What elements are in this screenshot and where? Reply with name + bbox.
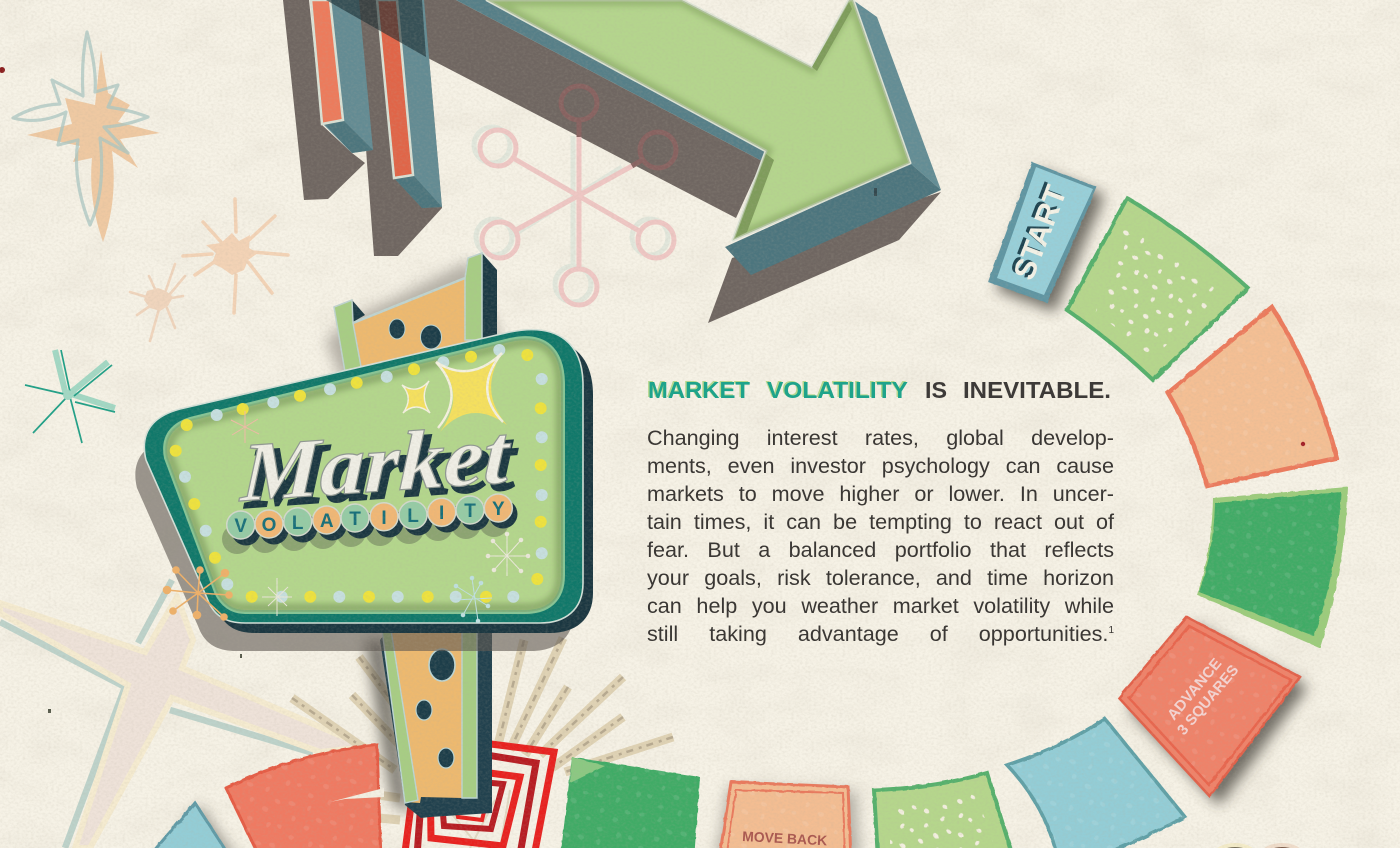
arrow right shaft: [394, 0, 442, 208]
arrow cast shadow: [283, 0, 365, 200]
paragraph text: can help you weather market volatility while: [647, 593, 1114, 618]
Volatility lettered balls: V: [234, 516, 247, 537]
paragraph text: ments, even investor psychology can cause: [647, 453, 1114, 478]
paragraph text: [647, 425, 1114, 646]
board tile: green, centre: [560, 757, 700, 848]
board tile: advance 3 squares: 3 SQUARES: [1174, 662, 1242, 739]
heading: Market Volatility is inevitable: [646, 376, 1111, 403]
Volatility lettered balls: I: [439, 503, 444, 524]
partial circles at bottom edge: [1214, 843, 1303, 848]
sign green face: [165, 338, 563, 612]
paragraph text: markets to move higher or lower. In uncer-: [647, 481, 1114, 506]
start tile: START: [1008, 181, 1074, 285]
decorative star: big faded star, bottom left: [0, 580, 367, 848]
Volatility lettered balls: I: [381, 508, 387, 529]
heading: Market Volatility is inevitable: IS: [925, 377, 947, 403]
start tile: START: [1005, 179, 1071, 283]
board tile: move back: [716, 782, 860, 848]
arrow inner shading: [735, 2, 852, 238]
arrow walls: [456, 0, 766, 161]
Volatility lettered balls: Y: [492, 499, 505, 520]
big arrow sign, top centre: [283, 0, 941, 323]
blue atom on sign: [454, 576, 492, 623]
board tile: move back: MOVE BACK: [742, 828, 828, 848]
coral tile torn edge: [330, 788, 384, 802]
board tile: advance 3 squares: [1119, 617, 1308, 806]
board tile: peach: [1168, 307, 1337, 486]
lower post holes: [429, 649, 455, 681]
arrow green top face: [487, 0, 910, 240]
board tile: advance 3 squares: ADVANCE: [1164, 655, 1225, 724]
sign post: lower part: [365, 630, 492, 818]
paragraph text: still taking advantage of opportunities.1: [647, 621, 1114, 646]
paragraph text: your goals, risk tolerance, and time horizon: [647, 565, 1114, 590]
heading: Market Volatility is inevitable: VOLATILITY: [767, 377, 908, 403]
concentric red squares: [404, 735, 554, 848]
paragraph text: tain times, it can be tempting to react out of: [647, 509, 1114, 534]
paper specks: [0, 67, 1305, 713]
start tile: [988, 162, 1105, 312]
sign marquee lights: [170, 344, 548, 603]
paragraph text: fear. But a balanced portfolio that reflects: [647, 537, 1114, 562]
Volatility lettered balls: A: [320, 511, 334, 532]
white atom on sign: [486, 532, 530, 576]
heading: Market Volatility is inevitable: VOLATILITY: [766, 376, 906, 402]
sign yellow star large: [436, 353, 507, 432]
white sparkle on sign: [262, 578, 292, 616]
sign dark extrusion: [154, 340, 593, 633]
paragraph text: Changing interest rates, global develop-: [647, 425, 1114, 450]
orange atom at sign corner: [164, 567, 232, 620]
board tile: blue, lower right: [1007, 719, 1185, 848]
sign yellow star small: [402, 381, 430, 413]
decorative star: teal asterisk: [25, 350, 115, 443]
heading: Market Volatility is inevitable: MARKET: [646, 376, 748, 402]
Market script lettering: Market: [243, 414, 519, 526]
Volatility lettered balls: [222, 494, 518, 554]
board tile: coral, left: [226, 745, 384, 848]
pink sparkle on sign: [231, 411, 259, 443]
upper post holes: [389, 319, 405, 339]
heading: Market Volatility is inevitable: MARKET: [648, 377, 750, 403]
decorative star: orange and teal sparkle, top left: [13, 32, 160, 242]
board tile: light green, top: [1067, 198, 1248, 380]
Volatility lettered balls: T: [464, 501, 476, 522]
sign post: upper part: [325, 253, 500, 400]
decorative sparkle: large peach burst: [183, 199, 288, 313]
board tile: blue, bottom left: [146, 803, 238, 848]
Volatility lettered balls: T: [349, 509, 361, 530]
board tile: light green, bottom: [874, 773, 1014, 848]
sign teal frame: [144, 330, 583, 623]
Market Volatility neon sign board: [144, 330, 593, 633]
sunburst rays behind the post: [292, 638, 673, 848]
Volatility lettered balls: L: [292, 513, 304, 534]
arrow left shaft: [324, 0, 373, 153]
Market script lettering: Market: [237, 408, 513, 520]
Volatility lettered balls: O: [262, 515, 276, 536]
shadow over shafts: [326, 0, 426, 57]
decorative atom: pink and teal starburst: [474, 86, 676, 305]
sign board shadow: [135, 358, 574, 651]
heading: Market Volatility is inevitable: INEVITABLE.: [963, 377, 1111, 403]
Volatility lettered balls: L: [407, 506, 419, 527]
board tile: green, right: [1197, 487, 1348, 648]
decorative sparkle: small peach burst: [130, 264, 185, 341]
